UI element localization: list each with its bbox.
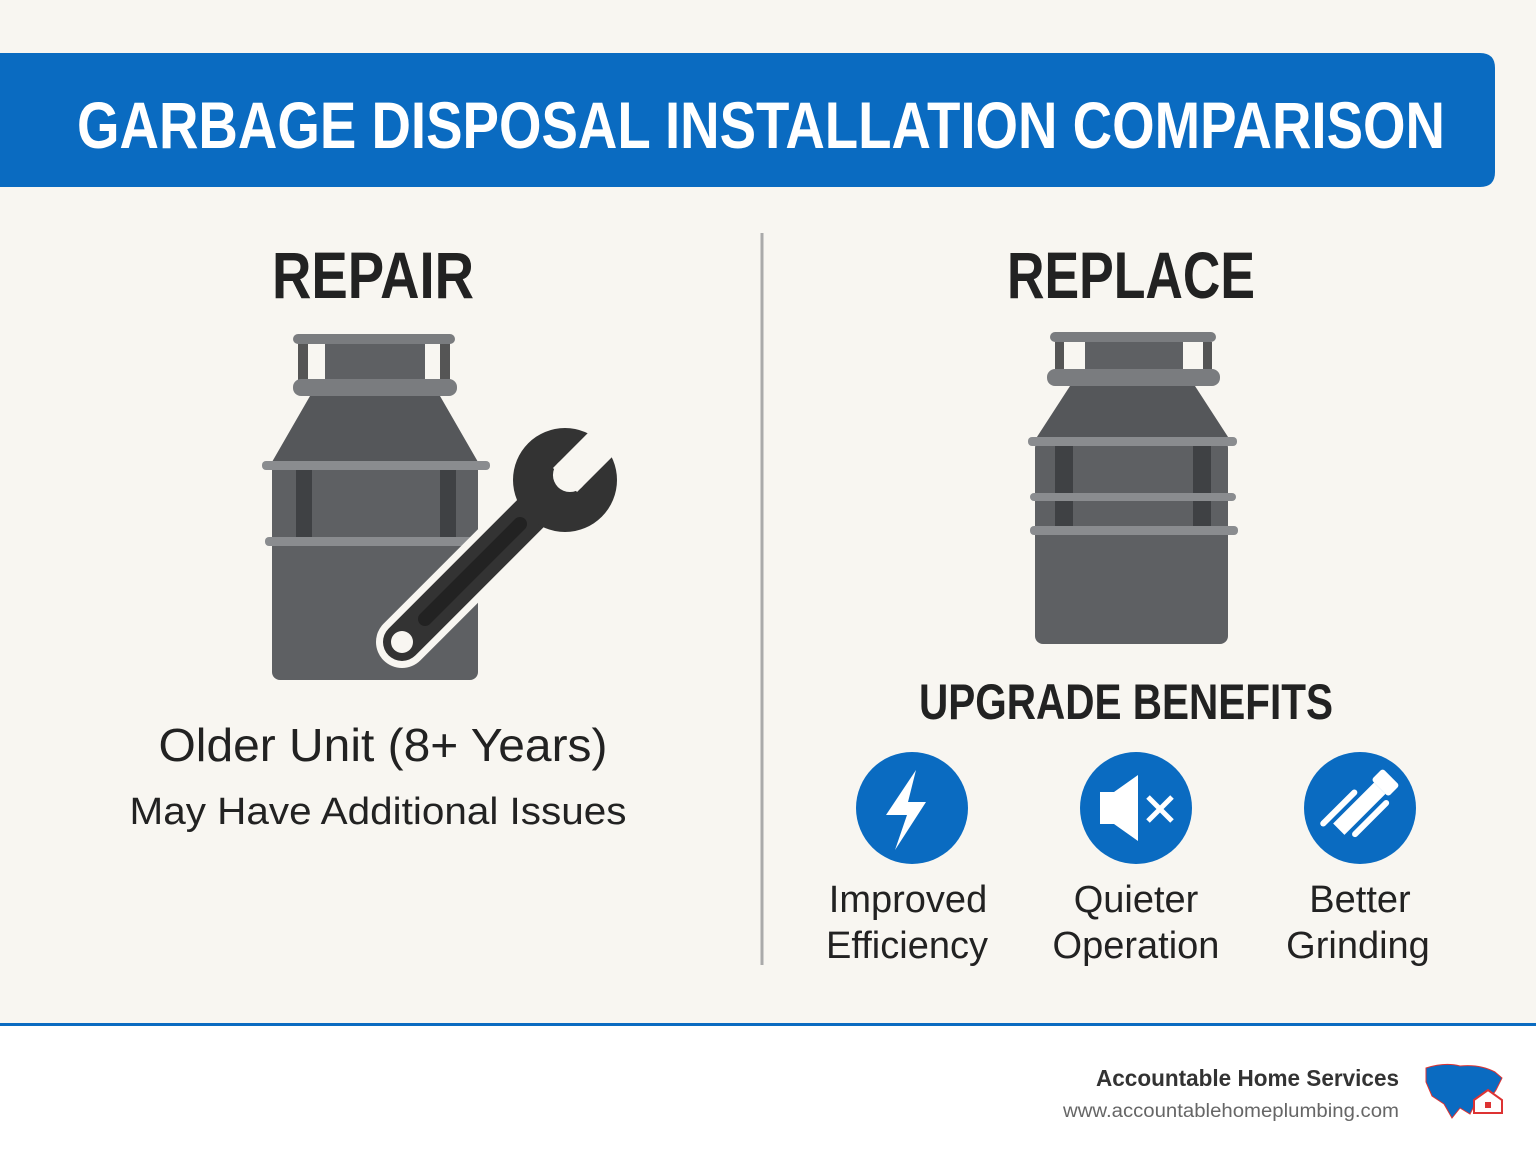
- text: older unit: Older Unit (8+ Years): [158, 719, 608, 771]
- footer: Accountable Home Services: [1096, 1065, 1399, 1091]
- footer: www.accountablehomeplumbing.com: [1062, 1101, 1399, 1122]
- title banner: [0, 53, 1495, 187]
- text: additional issues: May Have Additional Issues: [130, 791, 626, 833]
- benefit: better grinding: Better: [1309, 879, 1411, 921]
- icon: new disposal: [1028, 332, 1238, 644]
- benefit: better grinding: Grinding: [1286, 925, 1430, 967]
- footer: [0, 1023, 1536, 1154]
- benefit: improved efficiency: Efficiency: [826, 925, 988, 967]
- icon: disposal with wrench: [262, 334, 619, 680]
- benefit: quieter operation: [1053, 752, 1219, 967]
- heading: replace: REPLACE: [1007, 238, 1255, 312]
- benefit: improved efficiency: [826, 752, 988, 967]
- benefit: improved efficiency: Improved: [829, 879, 987, 921]
- benefit: quieter operation: Operation: [1053, 925, 1219, 967]
- benefit: quieter operation: Quieter: [1074, 879, 1199, 921]
- heading: repair: REPAIR: [272, 238, 474, 312]
- heading: upgrade benefits: UPGRADE BENEFITS: [919, 674, 1333, 730]
- logo: [1426, 1064, 1502, 1118]
- benefit: better grinding: [1286, 752, 1430, 967]
